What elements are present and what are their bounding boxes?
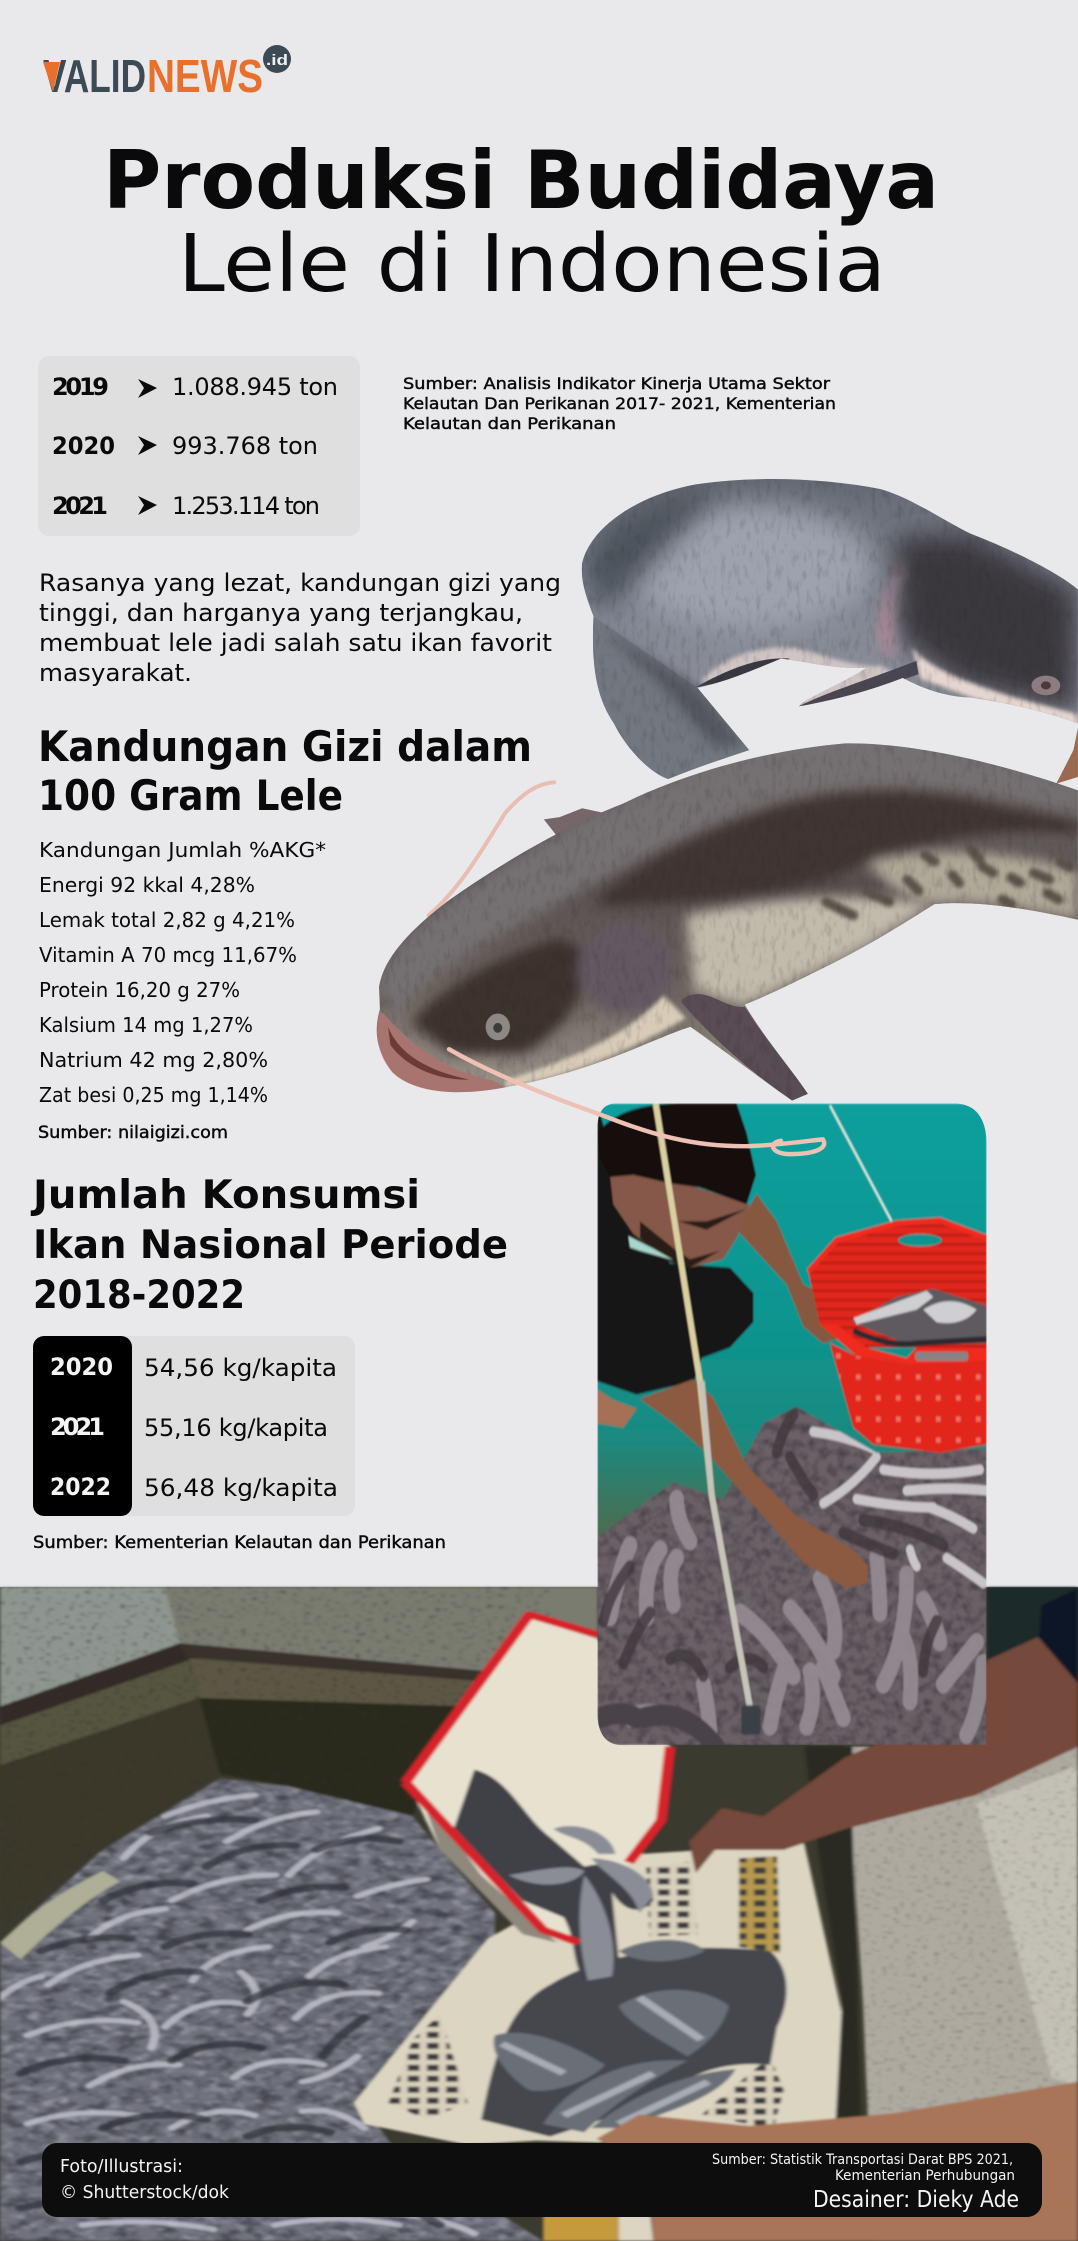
photo credit xyxy=(60,2156,230,2203)
crate edge below bar xyxy=(619,2204,653,2241)
nutrition list xyxy=(39,838,326,1107)
source note: production: Kelautan Dan Perikanan 2017- 2021, Kementerian xyxy=(403,394,836,413)
barbel: long loop xyxy=(449,1049,824,1154)
lower arm and hand xyxy=(597,2082,1078,2241)
worker: shirt and shorts xyxy=(597,1103,753,1395)
row 2020 xyxy=(52,432,318,460)
worker: hair xyxy=(597,1103,756,1204)
red basket xyxy=(808,1219,987,1453)
data source: Sumber: Statistik Transportasi Darat BPS 2021, xyxy=(712,2152,1013,2168)
row 2021: 1.253.114 ton xyxy=(172,492,320,520)
year column: 2022 xyxy=(50,1473,111,1501)
values column: 56,48 kg/kapita xyxy=(144,1474,338,1502)
year column: 2020 xyxy=(50,1353,113,1381)
photo: fish pile, net and crate xyxy=(0,1587,1078,2241)
hose xyxy=(652,1104,709,1492)
heading: nutrition: Kandungan Gizi dalam xyxy=(38,722,532,771)
logo: Validnews.id: NEWS xyxy=(147,50,263,102)
data source: Kementerian Perhubungan xyxy=(835,2168,1015,2184)
row 2019 xyxy=(52,373,338,401)
title: Produksi Budidaya xyxy=(103,134,939,227)
lips xyxy=(377,1011,505,1092)
hose end cap xyxy=(741,1705,761,1735)
rope xyxy=(830,1106,892,1221)
source note: production xyxy=(403,374,836,433)
year column: 2021 xyxy=(50,1413,105,1441)
worker: beard and brow xyxy=(640,1209,747,1268)
nutrition list: Energi 92 kkal 4,28% xyxy=(39,873,255,897)
row 2021 xyxy=(52,492,320,520)
panel: consumption per year xyxy=(33,1336,355,1516)
heading: consumption: 2018-2022 xyxy=(33,1273,245,1318)
fish in crate xyxy=(481,1940,786,2137)
photo credit: Foto/Illustrasi: xyxy=(60,2156,183,2177)
heading: consumption: Ikan Nasional Periode xyxy=(33,1223,508,1268)
heading: consumption xyxy=(30,1173,508,1318)
nutrition list: Zat besi 0,25 mg 1,14% xyxy=(39,1083,268,1107)
footer bar: credits xyxy=(42,2143,1042,2217)
worker: upper arm and hand xyxy=(738,1192,838,1346)
heading: nutrition: 100 Gram Lele xyxy=(38,771,343,820)
fish pile on floor xyxy=(597,1406,987,1747)
tank walls xyxy=(0,1587,598,1924)
teal tub background xyxy=(597,1103,987,1566)
intro paragraph: Rasanya yang lezat, kandungan gizi yang xyxy=(39,569,561,597)
title: Lele di Indonesia xyxy=(178,218,886,310)
crate mesh windows xyxy=(388,1856,784,2128)
photo credit: © Shutterstock/dok xyxy=(60,2182,230,2203)
heading: nutrition xyxy=(38,722,532,820)
intro paragraph: membuat lele jadi salah satu ikan favorit xyxy=(39,629,552,657)
hose lower section xyxy=(702,1381,750,1707)
upper arm and hand xyxy=(689,1637,1078,1873)
year column xyxy=(33,1336,132,1516)
row 2020: 993.768 ton xyxy=(172,432,318,460)
crate bottom below bar xyxy=(543,2212,619,2241)
values column: 54,56 kg/kapita xyxy=(144,1354,337,1382)
nutrition list: Protein 16,20 g 27% xyxy=(39,978,240,1002)
net xyxy=(406,1615,670,1981)
intro paragraph: masyarakat. xyxy=(39,659,192,687)
logo: Validnews.id: .id xyxy=(266,52,288,69)
logo: Validnews.id: VALID xyxy=(43,50,146,102)
source note: nutrition: Sumber: nilaigizi.com xyxy=(38,1123,228,1143)
intro paragraph: tinggi, dan harganya yang terjangkau, xyxy=(39,599,523,627)
dark gap and right wall xyxy=(804,1747,1078,2241)
dorsal fin behind head xyxy=(544,808,603,839)
values column xyxy=(144,1354,338,1502)
worker: face xyxy=(610,1175,750,1268)
nutrition list: Kandungan Jumlah %AKG* xyxy=(39,838,326,862)
worker: mask xyxy=(628,1236,673,1260)
values column: 55,16 kg/kapita xyxy=(144,1414,328,1442)
row 2019: 2019 xyxy=(52,373,109,401)
data source xyxy=(712,2152,1015,2184)
sleeve and background top right xyxy=(987,1587,1078,1683)
barbel: top xyxy=(429,782,554,915)
upper catfish xyxy=(573,473,1078,786)
heading: consumption: Jumlah Konsumsi xyxy=(30,1173,420,1218)
row 2019: 1.088.945 ton xyxy=(172,373,338,401)
title xyxy=(103,134,939,310)
mouth xyxy=(388,1027,469,1080)
source note: production: Sumber: Analisis Indikator Kinerja Utama Sektor xyxy=(403,374,830,393)
nutrition list: Natrium 42 mg 2,80% xyxy=(39,1048,268,1072)
catfish illustration: two fish xyxy=(370,473,1078,1154)
source note: consumption: Sumber: Kementerian Kelautan dan Perikanan xyxy=(33,1533,446,1553)
worker: lower arm and hand xyxy=(640,1379,868,1588)
nutrition list: Lemak total 2,82 g 4,21% xyxy=(39,908,295,932)
nutrition list: Kalsium 14 mg 1,27% xyxy=(39,1013,253,1037)
fish pile xyxy=(0,1766,550,2241)
logo: Validnews.id xyxy=(43,45,291,102)
row 2021: 2021 xyxy=(52,492,108,520)
source note: production: Kelautan dan Perikanan xyxy=(403,414,616,433)
row 2020: 2020 xyxy=(52,432,115,460)
panel: production per year xyxy=(38,356,360,536)
lower catfish xyxy=(370,737,1078,1154)
nutrition list: Vitamin A 70 mcg 11,67% xyxy=(39,943,297,967)
designer credit: Desainer: Dieky Ade xyxy=(813,2187,1019,2213)
crate xyxy=(354,1844,842,2145)
photo: worker sorting catfish xyxy=(597,1103,987,1747)
worker: foot xyxy=(597,1390,637,1428)
intro paragraph xyxy=(39,569,561,687)
